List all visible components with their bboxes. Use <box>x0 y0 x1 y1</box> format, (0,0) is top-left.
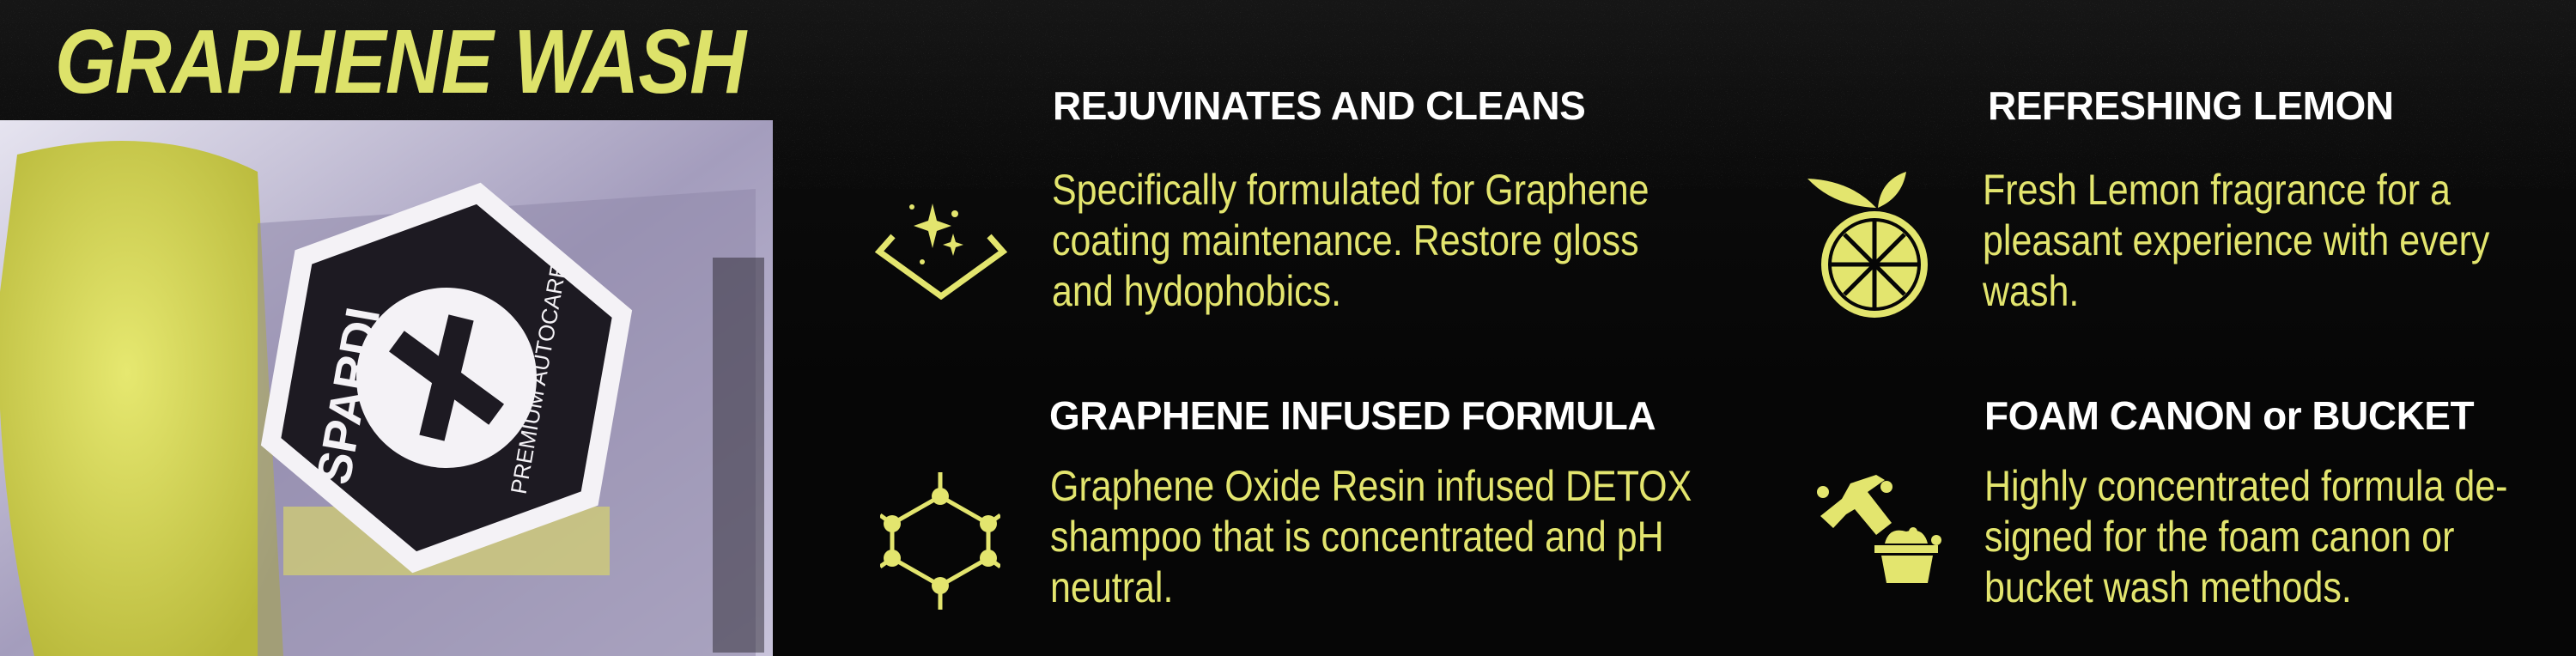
feature: refreshing lemon <box>1807 83 2490 318</box>
title: GRAPHENE WASH <box>55 11 745 112</box>
icon: sparkle diamond <box>874 203 1008 300</box>
product photo <box>0 120 773 656</box>
icon: lemon slice <box>1807 172 1928 318</box>
body: foam: Highly concentrated formula de- <box>1984 462 2507 510</box>
feature: foam canon or bucket <box>1817 393 2507 611</box>
body: rejuvinates <box>1052 166 1649 315</box>
body: formula: neutral. <box>1050 563 1173 611</box>
body: foam <box>1984 462 2507 611</box>
body: lemon: Fresh Lemon fragrance for a <box>1983 166 2451 214</box>
heading: foam: FOAM CANON or BUCKET <box>1984 393 2474 438</box>
body: foam: bucket wash methods. <box>1984 563 2352 611</box>
body: rejuvinates: coating maintenance. Restore gloss <box>1052 216 1639 264</box>
icon: spray bottle and bucket <box>1817 475 1941 583</box>
heading: rejuvinates: REJUVINATES AND CLEANS <box>1053 83 1585 128</box>
body: lemon <box>1983 166 2490 315</box>
logo hexagon: PREMIUM AUTOCARE <box>506 261 572 496</box>
body: rejuvinates: and hydophobics. <box>1052 267 1341 315</box>
body: formula <box>1050 462 1692 611</box>
body: rejuvinates: Specifically formulated for Graphene <box>1052 166 1649 214</box>
icon: hexagon molecule <box>880 472 1000 610</box>
logo hexagon <box>202 149 691 607</box>
body: lemon: pleasant experience with every <box>1983 216 2489 264</box>
feature: graphene infused formula <box>880 393 1692 611</box>
feature: rejuvinates and cleans <box>874 83 1649 315</box>
heading: lemon: REFRESHING LEMON <box>1988 83 2393 128</box>
body: formula: shampoo that is concentrated and pH <box>1050 513 1664 561</box>
body: formula: Graphene Oxide Resin infused DETOX <box>1050 462 1692 510</box>
heading: formula: GRAPHENE INFUSED FORMULA <box>1049 393 1656 438</box>
body: foam: signed for the foam canon or <box>1984 513 2454 561</box>
body: lemon: wash. <box>1983 267 2079 315</box>
logo hexagon: SPARDI <box>306 303 390 489</box>
